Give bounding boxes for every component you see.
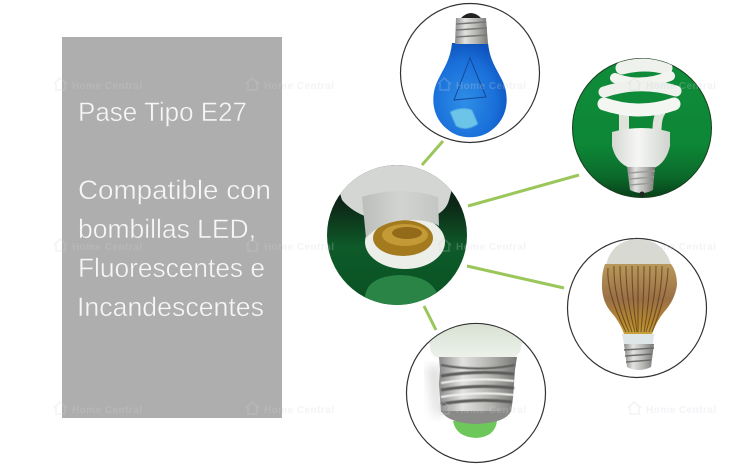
watermark logos: Home Central bbox=[456, 405, 526, 416]
icon: blue incandescent bulb bbox=[400, 4, 540, 142]
watermark logos: Home Central bbox=[72, 81, 142, 92]
text block: compatibility: Compatible con bbox=[78, 175, 271, 205]
text block: compatibility: Fluorescentes e bbox=[78, 253, 265, 283]
watermark logos: Home Central bbox=[646, 81, 716, 92]
icon: close-up of E27 screw base bbox=[406, 322, 546, 462]
text block: compatibility: Incandescentes bbox=[77, 292, 264, 322]
watermark logos: Home Central bbox=[646, 405, 716, 416]
watermark logos: Home Central bbox=[72, 242, 142, 253]
icon: LED bulb with gold fins bbox=[568, 238, 706, 378]
watermark logos bbox=[54, 78, 716, 416]
watermark logos: Home Central bbox=[72, 405, 142, 416]
panel heading: Pase Tipo E27: Pase Tipo E27 bbox=[78, 97, 247, 127]
watermark logos: Home Central bbox=[456, 242, 526, 253]
icon: green circle with fluorescent spiral bulb bbox=[572, 58, 712, 198]
connector lines bbox=[422, 141, 579, 330]
watermark logos: Home Central bbox=[264, 242, 334, 253]
watermark logos: Home Central bbox=[264, 405, 334, 416]
icon: lamp socket E27 in dark green circle bbox=[327, 160, 467, 312]
text block: compatibility: bombillas LED, bbox=[78, 214, 256, 244]
text block: compatibility bbox=[77, 175, 271, 322]
watermark logos: Home Central bbox=[646, 242, 716, 253]
watermark logos: Home Central bbox=[456, 81, 526, 92]
panel: text background bbox=[62, 37, 282, 418]
watermark logos: Home Central bbox=[264, 81, 334, 92]
